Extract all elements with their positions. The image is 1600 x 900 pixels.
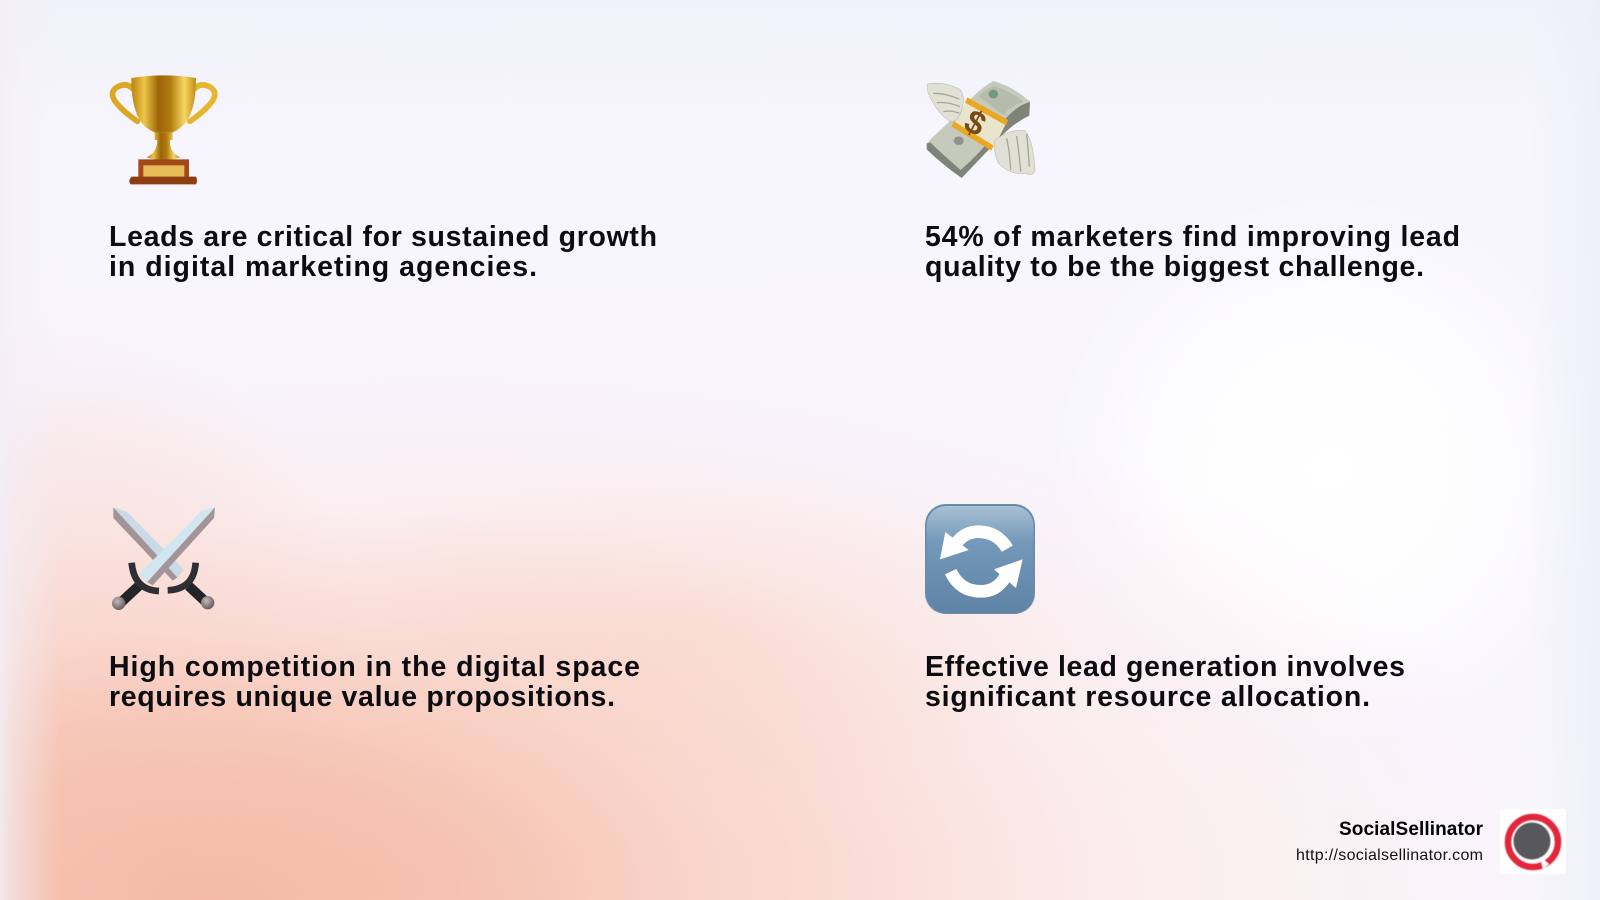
panel: resource allocation — [925, 504, 1405, 713]
text: quality statement: quality to be the biggest challenge. — [925, 251, 1424, 283]
text: resource statement: significant resource allocation. — [925, 681, 1370, 713]
text: competition statement: requires unique value propositions. — [109, 681, 615, 713]
panel: high competition — [109, 507, 640, 713]
icon: money with wings — [927, 81, 1035, 178]
icon detail: dollar sign: $ — [958, 103, 992, 144]
panel: leads are critical — [109, 75, 657, 283]
text: quality statement: 54% of marketers find improving lead — [925, 221, 1460, 253]
text: leads statement: in digital marketing agencies. — [109, 251, 537, 283]
icon: crossed swords — [112, 507, 215, 610]
panel: lead quality — [925, 81, 1460, 283]
text: leads statement: Leads are critical for sustained growth — [109, 221, 657, 253]
text: brand url: http://socialsellinator.com — [1296, 847, 1483, 864]
branding footer — [1296, 809, 1566, 874]
text: resource statement: Effective lead generation involves — [925, 651, 1405, 683]
icon: refresh arrows — [925, 504, 1035, 614]
text: brand name: SocialSellinator — [1339, 819, 1484, 840]
text: competition statement: High competition in the digital space — [109, 651, 640, 683]
icon: logo — [1500, 809, 1566, 874]
icon: trophy — [113, 75, 215, 184]
